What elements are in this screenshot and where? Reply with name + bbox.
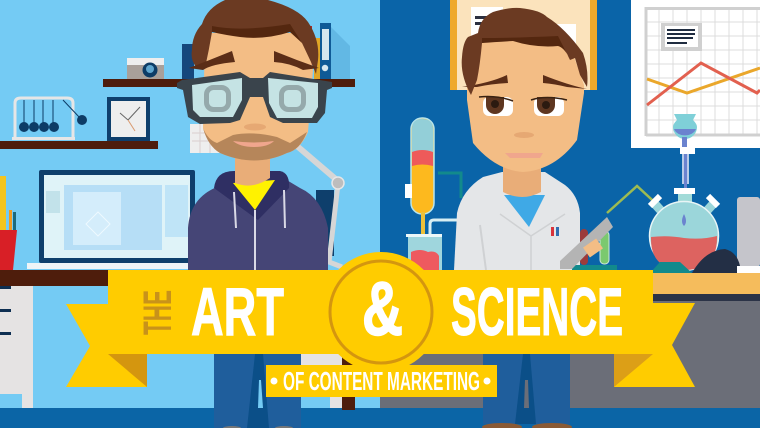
test tube with yellow liquid [405, 118, 461, 234]
banner body [108, 270, 653, 354]
legs [482, 350, 572, 428]
round-bottom flask [607, 186, 718, 270]
lab coat [454, 172, 580, 270]
pencil cup [0, 176, 17, 270]
beard [203, 128, 307, 160]
floor [0, 408, 760, 428]
hoodie [188, 171, 328, 270]
ampersand: & [362, 267, 403, 352]
eyebrows [189, 51, 319, 70]
panel: science side background [380, 0, 760, 428]
upper shelf with books and camera [103, 23, 355, 87]
whiteboard line chart [631, 0, 760, 148]
laptop [27, 170, 195, 269]
eyes [479, 96, 567, 116]
science bench and equipment [650, 197, 760, 301]
mouth [233, 141, 274, 147]
nose [244, 124, 266, 130]
lower shelf with newton's cradle and clock [0, 97, 158, 149]
head [203, 33, 313, 160]
science side lower wall [380, 300, 760, 408]
t-shirt and neck [233, 150, 275, 210]
glasses [177, 72, 332, 124]
subtitle ribbon [266, 365, 497, 397]
word: the: THE [136, 290, 180, 335]
character: art designer [177, 0, 332, 428]
funnel and stand [673, 114, 697, 229]
subtitle bullets [270, 378, 490, 384]
head [467, 40, 584, 172]
nose and mouth [505, 132, 543, 158]
desk lamp and calendar [190, 124, 344, 267]
character: scientist [454, 8, 588, 428]
corkboard [450, 0, 597, 90]
left ribbon tail [66, 304, 147, 387]
circle badge [321, 252, 441, 372]
hair [462, 8, 588, 95]
right ribbon tail [614, 303, 695, 387]
word: science: SCIENCE [451, 274, 623, 350]
legs [214, 350, 301, 428]
neck [503, 160, 541, 197]
hair [192, 0, 318, 74]
title banner [66, 252, 695, 397]
test tubes and clipboard held by scientist [560, 217, 617, 270]
beaker with red liquid [406, 220, 458, 271]
panel: art side background [0, 0, 380, 428]
subtitle text: OF CONTENT MARKETING [283, 366, 480, 396]
eyebrows [462, 75, 587, 89]
art desk with drawers [0, 270, 355, 410]
word: art: ART [191, 274, 284, 350]
